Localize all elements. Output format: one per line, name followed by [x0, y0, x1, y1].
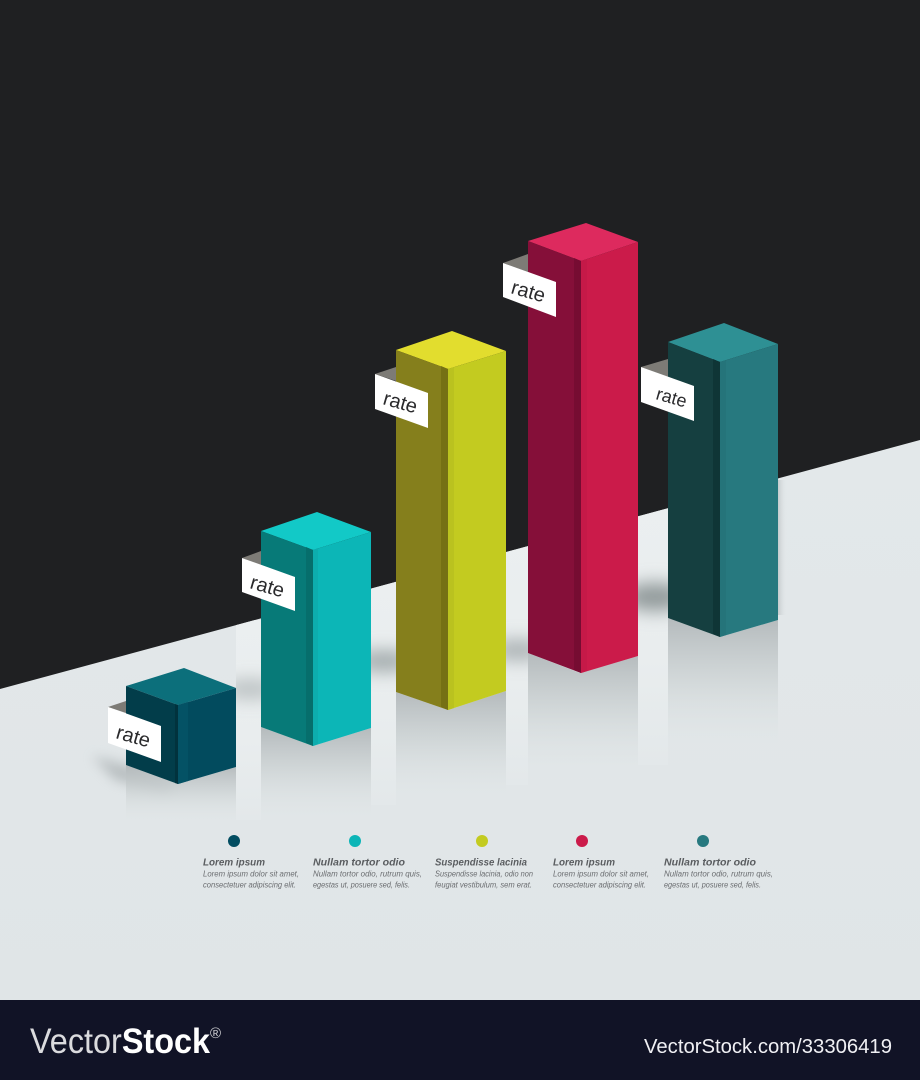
label: bar 2 rate: rate	[248, 572, 287, 602]
label: bar 5 rate	[641, 359, 694, 421]
legend item 4: Lorem ipsum dolor sit amet,	[553, 868, 649, 878]
bar 5: muted teal	[668, 323, 778, 637]
infographic canvas	[0, 223, 920, 1080]
legend item 2: Nullam tortor odio	[313, 858, 405, 868]
legend item 4: Lorem ipsum	[553, 858, 615, 868]
legend item 3: feugiat vestibulum, sem erat.	[435, 880, 532, 890]
legend item 3	[435, 835, 533, 890]
label: bar 2 rate	[242, 551, 295, 611]
floor	[0, 440, 920, 1000]
footer bar	[0, 1000, 920, 1080]
legend item 4: consectetuer adipiscing elit.	[553, 880, 646, 890]
legend item 3: Suspendisse lacinia	[435, 858, 527, 868]
legend item 1	[203, 835, 299, 890]
label: bar 4 rate	[503, 254, 556, 317]
bar 2: cyan	[261, 512, 371, 746]
label: bar 3 rate: rate	[381, 388, 420, 418]
legend item 4	[553, 835, 649, 890]
legend item 5	[664, 835, 773, 890]
legend item 2	[313, 835, 422, 890]
legend item 1: consectetuer adipiscing elit.	[203, 880, 296, 890]
legend item 2: egestas ut, posuere sed, felis.	[313, 880, 410, 890]
label: bar 4 rate: rate	[509, 277, 548, 307]
footer url: VectorStock.com/33306419	[644, 1036, 892, 1058]
floor shadows and reflections	[92, 480, 787, 825]
legend item 2: Nullam tortor odio, rutrum quis,	[313, 868, 422, 878]
label: bar 1 rate: rate	[114, 722, 153, 752]
label: bar 3 rate	[375, 367, 428, 428]
legend item 5: Nullam tortor odio	[664, 858, 756, 868]
bar 4: crimson	[528, 223, 638, 673]
legend item 1: Lorem ipsum dolor sit amet,	[203, 868, 299, 878]
legend item 5: egestas ut, posuere sed, felis.	[664, 880, 761, 890]
bar 3: yellow-green	[396, 331, 506, 710]
legend item 1: Lorem ipsum	[203, 858, 265, 868]
bar 1: dark teal	[126, 668, 236, 784]
legend item 3: Suspendisse lacinia, odio non	[435, 868, 533, 878]
label: bar 5 rate: rate	[654, 384, 689, 411]
label: bar 1 rate	[108, 701, 161, 762]
footer registered mark: ®	[210, 1025, 221, 1042]
legend item 5: Nullam tortor odio, rutrum quis,	[664, 868, 773, 878]
footer logo: VectorStock	[30, 1022, 210, 1061]
